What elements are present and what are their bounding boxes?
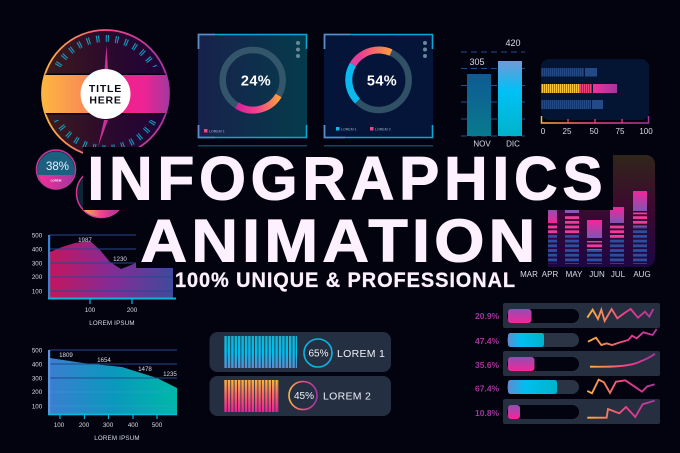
- gauge: title here: TITLE: [89, 83, 122, 95]
- horizontal bar chart: 75: [616, 127, 625, 136]
- area chart top: 400: [32, 246, 43, 254]
- donut panel 54%: LOREM 2: [375, 128, 391, 132]
- circle stat 38%: 38%: [46, 161, 69, 173]
- donut panel 54%: LOREM 1: [341, 128, 357, 132]
- gauge: title here: HERE: [89, 94, 122, 106]
- equalizer chart: APR: [542, 270, 558, 279]
- progress panel lorem 2: 45%: [294, 391, 314, 402]
- percentage rows with sparklines: 20.9%: [475, 311, 500, 321]
- equalizer chart: MAR: [520, 270, 538, 279]
- area chart bottom: [32, 348, 177, 442]
- area chart top: 200: [127, 307, 138, 314]
- bar chart nov dic: [461, 38, 525, 148]
- donut panel 24%: [198, 34, 307, 146]
- circle stat 38%: [36, 149, 76, 190]
- donut panel 24%: 24%: [241, 74, 271, 90]
- area chart top: 1230: [113, 256, 127, 263]
- title backdrop: [83, 147, 613, 290]
- equalizer chart: JUN: [589, 270, 605, 279]
- equalizer chart: MAY: [566, 270, 583, 279]
- horizontal bar chart: 0: [541, 127, 546, 136]
- area chart top: 1987: [78, 237, 92, 244]
- gauge: title here: [40, 30, 171, 157]
- bar chart nov dic: 420: [505, 38, 521, 48]
- area chart bottom: 400: [128, 422, 139, 429]
- percentage rows with sparklines: 10.8%: [475, 408, 500, 418]
- horizontal bar chart: 100: [639, 127, 653, 136]
- area chart bottom: 1654: [97, 357, 111, 364]
- equalizer chart: AUG: [633, 270, 651, 279]
- donut panel 24%: LOREM 1: [209, 130, 225, 134]
- horizontal bar chart: [541, 59, 653, 136]
- circle stat partly hidden: [76, 168, 126, 218]
- area chart bottom: 500: [32, 348, 43, 354]
- area chart bottom: 100: [54, 422, 65, 429]
- area chart bottom: 300: [32, 376, 43, 382]
- area chart top: 100: [85, 307, 96, 314]
- subtitle: 100% UNIQUE & PROFESSIONAL: [175, 268, 516, 292]
- area chart bottom: 1809: [59, 352, 73, 359]
- progress panel lorem 1: [210, 332, 391, 372]
- area chart bottom: 200: [79, 422, 90, 429]
- area chart bottom: 500: [152, 422, 163, 429]
- area chart bottom: 400: [32, 362, 43, 368]
- progress panel lorem 2: LOREM 2: [323, 390, 371, 402]
- donut panel 54%: 54%: [367, 74, 397, 90]
- bar chart nov dic: DIC: [506, 140, 520, 148]
- equalizer chart: JUL: [611, 270, 626, 279]
- donut panel 54%: [324, 34, 433, 146]
- title: animation: ANIMATION: [140, 208, 540, 274]
- circle stat 38%: LOREM: [51, 178, 62, 182]
- area chart top: 500: [32, 232, 43, 240]
- area chart bottom: 300: [103, 422, 114, 429]
- percentage rows with sparklines: 67.4%: [475, 384, 500, 394]
- area chart top: 200: [32, 274, 43, 281]
- area chart top: [32, 232, 176, 327]
- area chart top: 300: [32, 260, 43, 268]
- percentage rows with sparklines: 35.6%: [475, 360, 500, 370]
- percentage rows with sparklines: 47.4%: [475, 336, 500, 346]
- bar chart nov dic: 305: [469, 57, 485, 67]
- area chart bottom: 200: [32, 389, 43, 396]
- horizontal bar chart: 50: [590, 127, 599, 136]
- area chart bottom: 1235: [163, 371, 177, 378]
- area chart bottom: LOREM IPSUM: [94, 435, 140, 442]
- area chart bottom: 1478: [138, 366, 152, 373]
- percentage rows with sparklines: [475, 303, 660, 424]
- equalizer chart: [520, 155, 655, 279]
- area chart top: 100: [32, 288, 43, 296]
- area chart top: LOREM IPSUM: [89, 320, 135, 327]
- progress panel lorem 1: LOREM 1: [337, 348, 385, 360]
- progress panel lorem 2: [210, 376, 391, 416]
- title: infographics: INFOGRAPHICS: [88, 144, 608, 212]
- horizontal bar chart: 25: [563, 127, 572, 136]
- area chart bottom: 100: [32, 404, 43, 410]
- progress panel lorem 1: 65%: [308, 348, 329, 360]
- bar chart nov dic: NOV: [473, 140, 491, 148]
